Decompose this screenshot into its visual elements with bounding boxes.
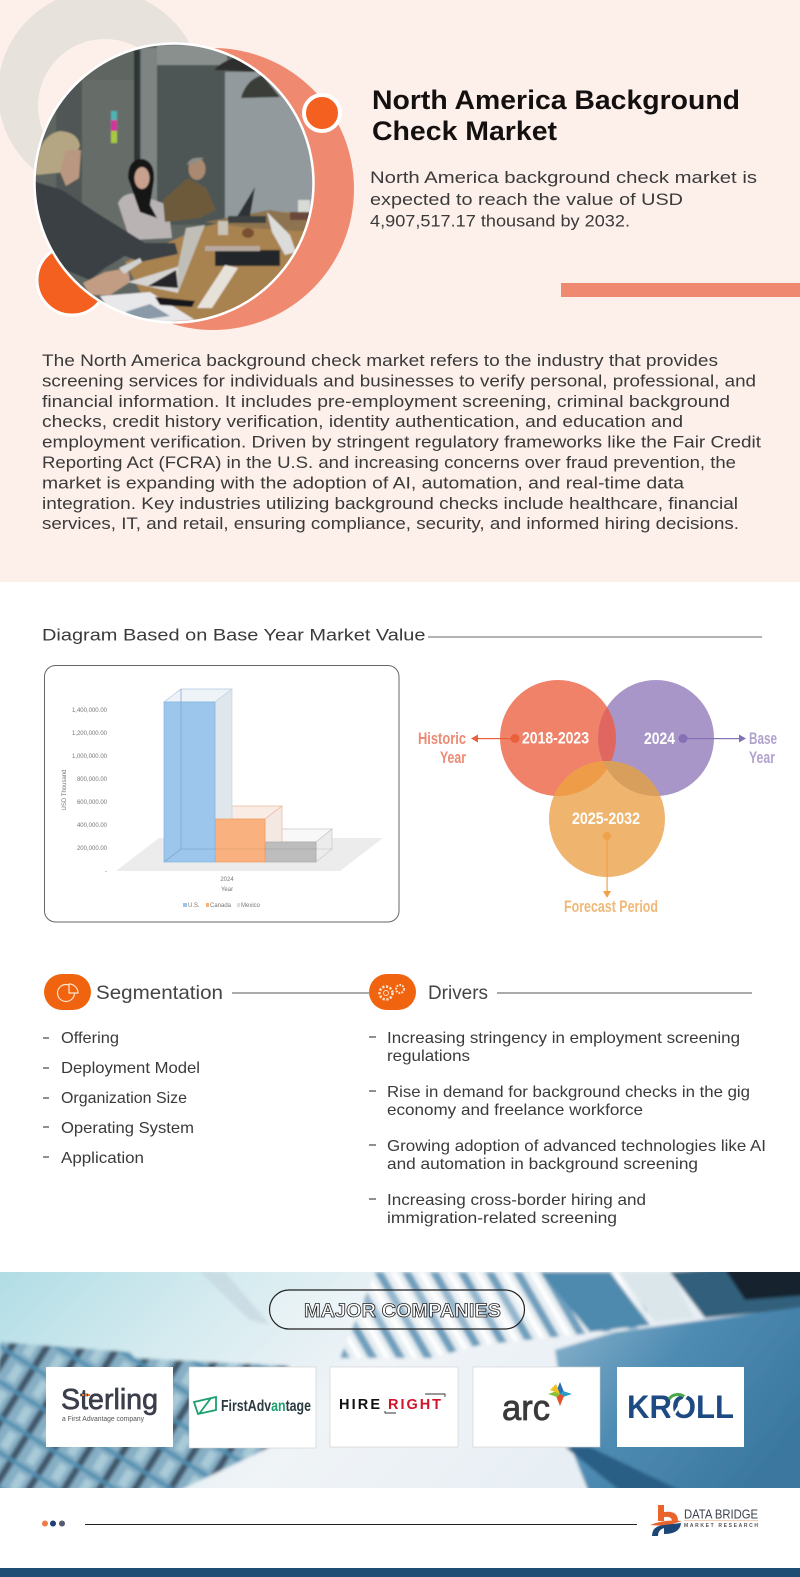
market description: screening services for individuals and businesses to verify personal, professional, and (42, 371, 756, 390)
y axis labels: 1,200,000.00 (72, 731, 108, 737)
drivers heading (369, 974, 752, 1010)
panel: bar chart (44, 666, 399, 922)
market description: Reporting Act (FCRA) in the U.S. and increasing concerns over fraud prevention, the (42, 453, 736, 472)
logo: Data Bridge Market Research: MARKET RESEARCH (684, 1523, 758, 1529)
label: forecast period: Forecast Period (564, 897, 658, 916)
drivers list: and automation in background screening (387, 1156, 698, 1173)
y axis labels: - (105, 869, 107, 875)
salmon accent bar (561, 283, 800, 297)
logo: Data Bridge Market Research: DATA BRIDGE (684, 1508, 758, 1522)
market description: The North America background check market refers to the industry that provides (42, 351, 718, 370)
logo card: Kroll (617, 1367, 744, 1447)
diagram heading: Diagram Based on Base Year Market Value (42, 626, 426, 644)
label: base year: Year (749, 748, 775, 767)
y axis labels: 1,000,000.00 (72, 754, 108, 760)
logo card: arc: arc (502, 1387, 550, 1428)
chart legend: Mexico (241, 903, 261, 909)
label: 2018-2023: 2018-2023 (522, 728, 589, 748)
segmentation heading: Segmentation (96, 982, 223, 1004)
segmentation list: Operating System (61, 1120, 194, 1137)
y axis labels: 400,000.00 (77, 823, 108, 829)
hero background panel (0, 0, 800, 582)
logo card: Kroll: KROLL (627, 1389, 734, 1425)
segmentation list: Organization Size (61, 1090, 187, 1107)
bar: Mexico (265, 842, 316, 862)
hero image cluster (0, 0, 354, 330)
drivers list: immigration-related screening (387, 1210, 617, 1227)
footer band (0, 1568, 800, 1577)
logo: Data Bridge Market Research (650, 1505, 758, 1536)
heading pill (270, 1290, 524, 1329)
logo mark (650, 1505, 682, 1536)
market description: integration. Key industries utilizing background checks include healthcare, financial (42, 494, 738, 513)
label: historic year (418, 729, 466, 767)
arrow: forecast (603, 832, 611, 898)
drivers list (369, 1030, 766, 1227)
drivers heading: Drivers (428, 982, 488, 1004)
drivers list: economy and freelance workforce (387, 1102, 643, 1119)
footer rule (85, 1524, 637, 1526)
logo card: arc (473, 1367, 600, 1447)
market description: checks, credit history verification, identity authentication, and education and (42, 412, 683, 431)
icon: pie chart (44, 974, 91, 1010)
y axis labels: 800,000.00 (77, 777, 108, 783)
logo card: Sterling: Sterling (61, 1384, 158, 1416)
orange circle top right (304, 95, 340, 131)
x axis labels: Year (221, 887, 233, 893)
x axis labels (220, 877, 234, 893)
market value summary: 4,907,517.17 thousand by 2032. (370, 212, 630, 230)
label: base year: Base (749, 729, 777, 748)
y axis labels: 600,000.00 (77, 800, 108, 806)
logo card: HireRight: HIRE (339, 1397, 380, 1413)
bar depth faces (164, 689, 332, 862)
market value summary (370, 168, 757, 230)
y axis labels: 1,400,000.00 (72, 708, 108, 714)
title: North America Background (372, 85, 740, 115)
x axis labels: 2024 (220, 877, 234, 883)
y axis title: USD Thousand (62, 770, 68, 810)
segmentation list: Offering (61, 1030, 119, 1047)
market description: services, IT, and retail, ensuring compliance, security, and informed hiring decisions. (42, 514, 739, 533)
photo: team meeting at table (30, 40, 320, 330)
salmon crescent (72, 48, 354, 330)
label: historic year: Year (440, 748, 466, 767)
arrow: base (678, 734, 746, 743)
chart legend: Canada (210, 903, 232, 909)
y axis labels: 200,000.00 (77, 846, 108, 852)
market description: financial information. It includes pre-employment screening, criminal background (42, 392, 730, 411)
circle overlaps (554, 707, 660, 796)
title: Check Market (372, 116, 557, 146)
label: 2024: 2024 (644, 729, 675, 748)
circle: forecast period (549, 761, 665, 877)
circle: historic years (500, 680, 616, 796)
logo card: HireRight (330, 1367, 458, 1447)
chart legend (183, 903, 261, 909)
drivers list: Rise in demand for background checks in the gig (387, 1084, 750, 1101)
orange circle bottom left (37, 245, 107, 315)
segmentation list: Application (61, 1150, 144, 1167)
label: 2025-2032: 2025-2032 (572, 809, 640, 828)
logo card: First Advantage (189, 1367, 316, 1448)
y axis labels (72, 708, 108, 875)
chart legend: U.S. (188, 903, 200, 909)
bar: Canada (215, 819, 265, 862)
market description: market is expanding with the adoption of AI, automation, and real-time data (42, 473, 685, 492)
market value summary: expected to reach the value of USD (370, 190, 683, 209)
market description: employment verification. Driven by stringent regulatory frameworks like the Fair Credit (42, 433, 761, 452)
bar: U.S. (164, 689, 332, 862)
logo card: Sterling (46, 1367, 173, 1447)
photo white outline (34, 44, 314, 322)
segmentation list: Deployment Model (61, 1060, 200, 1077)
segmentation list (43, 1030, 200, 1167)
drivers list: Growing adoption of advanced technologies like AI (387, 1138, 766, 1155)
chart floor (116, 838, 383, 871)
decorative grey ring (0, 0, 202, 194)
label: base year (749, 729, 777, 767)
label: historic year: Historic (418, 729, 466, 748)
icon: gears (369, 974, 416, 1010)
panel: major companies band (0, 1262, 800, 1498)
heading pill: MAJOR COMPANIES (304, 1300, 501, 1322)
market description (42, 351, 761, 533)
drivers list: Increasing cross-border hiring and (387, 1192, 646, 1209)
drivers list: regulations (387, 1048, 470, 1065)
arrow: historic (471, 734, 520, 743)
circle: base year (598, 680, 714, 796)
footer pagination dots (42, 1520, 65, 1526)
drivers list: Increasing stringency in employment screening (387, 1030, 740, 1047)
logo card: Sterling: a First Advantage company (62, 1416, 144, 1423)
logo card: First Advantage: FirstAdvantage (221, 1398, 311, 1415)
title (372, 85, 740, 146)
market value summary: North America background check market is (370, 168, 757, 187)
venn diagram: study periods (418, 680, 777, 916)
segmentation heading (44, 974, 369, 1010)
logo card: HireRight: RIGHT (388, 1397, 441, 1413)
